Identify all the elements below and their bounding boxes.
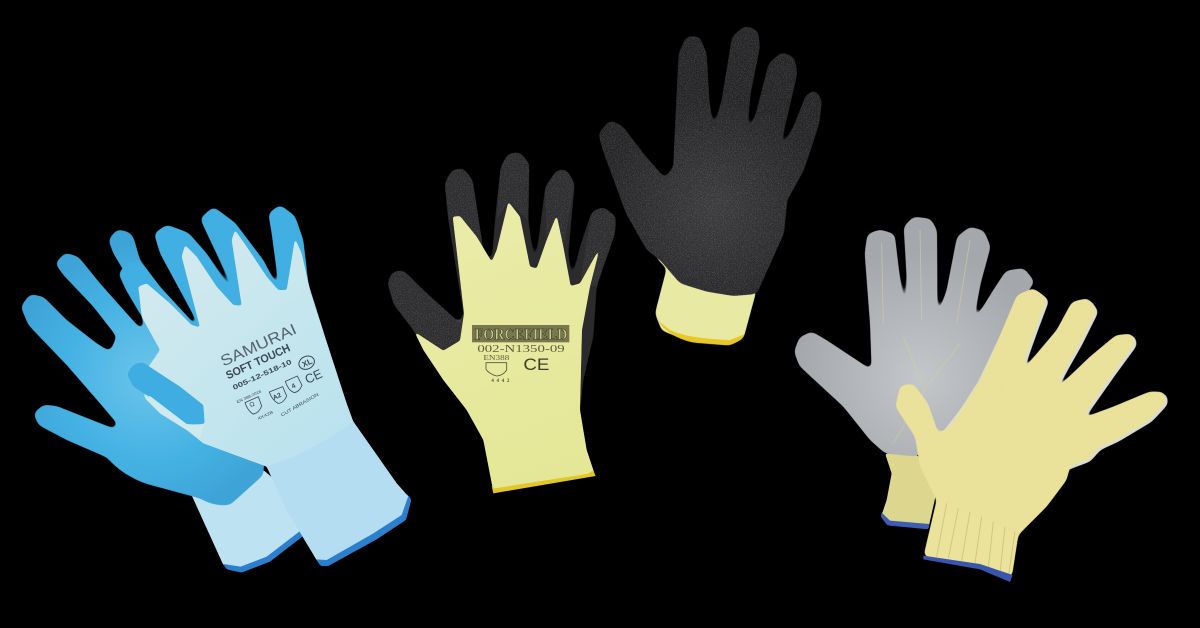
Forcefield printed logo — [472, 325, 569, 384]
back glove knit cuff — [881, 453, 940, 529]
Samurai printed logo: 4X42B — [257, 409, 274, 421]
brand name: FORCEFIELD — [475, 326, 567, 343]
Samurai printed logo: 4 — [291, 382, 297, 390]
grip speckle — [598, 25, 822, 296]
standards text: EN 388:2016 — [236, 388, 263, 404]
CE mark: CE — [523, 355, 549, 374]
size badge: XL — [301, 357, 314, 369]
front glove thumb — [127, 363, 205, 425]
yellow knit hand — [414, 202, 600, 492]
glove: yellow Forcefield with black coating, back view — [387, 152, 616, 493]
safety shields — [245, 376, 302, 414]
yellow cuff — [647, 250, 757, 346]
front glove blue hem — [923, 556, 1013, 582]
front glove pale hand and cuff — [138, 230, 411, 566]
thumb pale back — [145, 396, 204, 438]
rating: 4442 — [491, 379, 510, 384]
yellow cuff hem — [657, 318, 744, 346]
Samurai printed logo: A2 — [272, 392, 283, 402]
CE mark: CE — [303, 367, 325, 387]
Samurai printed logo: CUT ABRASION — [280, 392, 319, 418]
back glove blue palm and fingers — [21, 229, 267, 505]
product name: SOFT TOUCH — [224, 342, 292, 382]
ribbed cuff — [937, 503, 1015, 577]
product code: 002-N1350-09 — [477, 344, 565, 355]
standard: EN388 — [483, 353, 510, 362]
yellow cuff hem — [492, 471, 596, 493]
product code: 005-12-518-10 — [232, 359, 293, 392]
glove: black coated palm view with yellow cuff — [598, 25, 822, 346]
knit texture — [895, 288, 1166, 535]
brand name: SAMURAI — [218, 321, 299, 370]
front glove blue cuff edge — [316, 495, 411, 566]
grey leather palm and fingers — [794, 217, 1035, 457]
front glove blue coating — [118, 205, 325, 357]
front glove cuff ribbing — [267, 422, 410, 565]
glove pair: blue Samurai Soft Touch — [21, 205, 411, 573]
black palm and fingers — [598, 25, 822, 296]
pale lining edge — [950, 300, 1020, 430]
front glove white lining — [940, 290, 1168, 478]
leather seams — [882, 230, 970, 443]
black coated base — [387, 152, 616, 492]
back glove cuff — [190, 470, 307, 573]
glove pair: Kevlar knit with grey leather palm — [794, 217, 1168, 582]
front knit glove — [895, 288, 1166, 578]
back glove blue hem — [881, 513, 929, 529]
shield ratings: Ω — [249, 401, 256, 409]
logo bar — [472, 325, 569, 342]
coating speckle — [387, 152, 616, 350]
shield — [486, 363, 507, 376]
Samurai printed logo — [218, 321, 325, 421]
